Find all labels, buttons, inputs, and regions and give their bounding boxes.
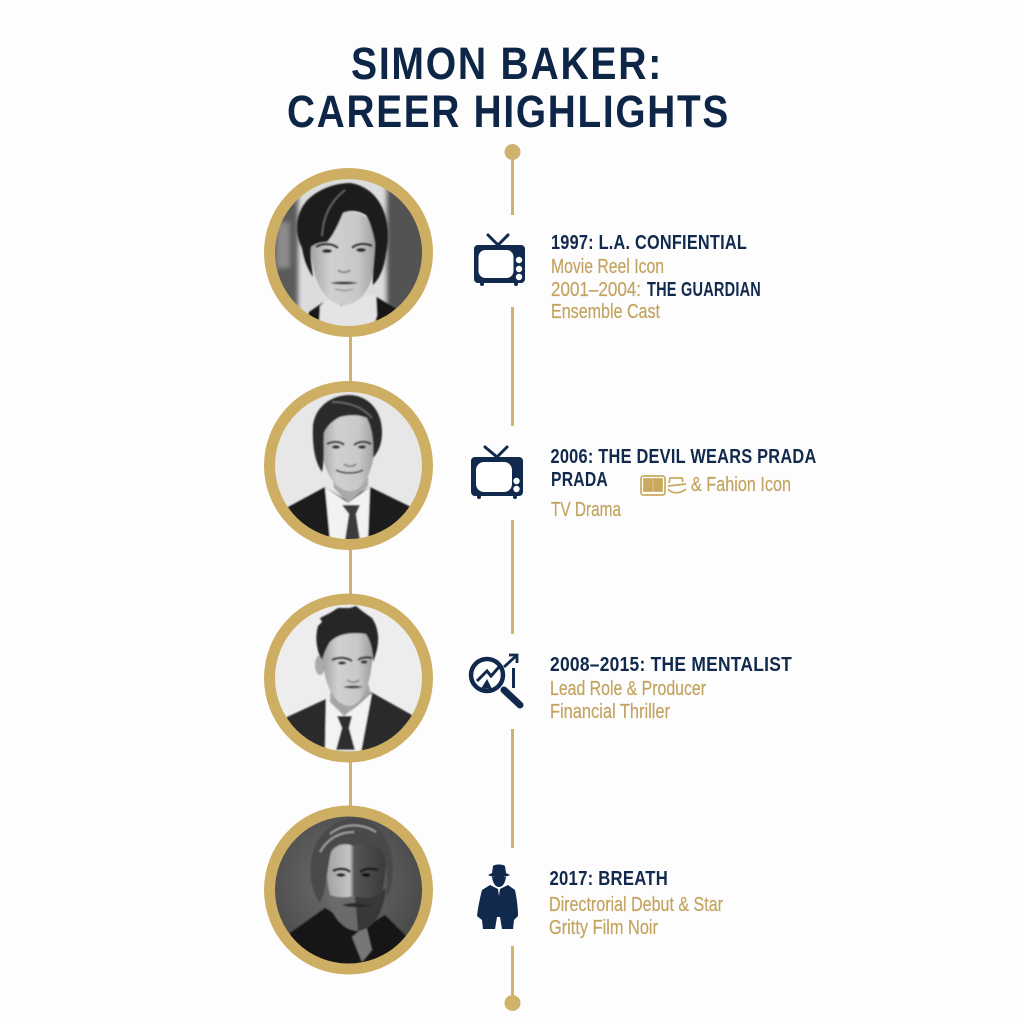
icon: television 1 (474, 235, 525, 286)
text: 1997 and 2001-2004 entries: Movie Reel Icon (551, 256, 664, 278)
text: 1997 and 2001-2004 entries: 1997: L.A. CONFIENTIAL (551, 231, 747, 254)
text: 2006 entry: 2006: THE DEVIL WEARS PRADA (550, 445, 816, 468)
text: 2017 entry: 2017: BREATH (550, 867, 668, 890)
text: 2017 entry: Directrorial Debut & Star (549, 894, 723, 916)
text: 1997 and 2001-2004 entries: THE GUARDIAN (647, 278, 761, 301)
title: SIMON BAKER: (351, 38, 663, 89)
text: 2008-2015 entry (550, 653, 792, 723)
icon: magnifier with chart (471, 655, 520, 705)
text: 2006 entry: TV Drama (551, 499, 622, 521)
title: CAREER HIGHLIGHTS (287, 86, 730, 137)
text: 2008-2015 entry: Financial Thriller (550, 701, 670, 723)
icon: television 2 (471, 447, 523, 499)
text: 2008-2015 entry: Lead Role & Producer (550, 678, 706, 700)
icon: book and shoe (641, 476, 686, 495)
text: 1997 and 2001-2004 entries (551, 231, 761, 323)
text: 2008-2015 entry: 2008–2015: THE MENTALIST (550, 653, 792, 676)
text: 2006 entry: & Fahion Icon (691, 474, 791, 496)
icon: noir detective silhouette (477, 864, 518, 929)
title (287, 38, 730, 137)
text: 2017 entry (549, 867, 723, 939)
portrait 4: bearded actor in shadow (270, 810, 430, 970)
portrait connector lines (349, 336, 352, 807)
text: 2006 entry: PRADA (551, 468, 608, 491)
text: 1997 and 2001-2004 entries: 2001–2004: (551, 279, 641, 301)
portrait 3: suited actor three-quarter (270, 598, 430, 758)
text: 2017 entry: Gritty Film Noir (549, 917, 658, 939)
central timeline (504, 144, 520, 1011)
text: 1997 and 2001-2004 entries: Ensemble Cast (551, 301, 660, 323)
portrait 1: young actor (270, 174, 430, 332)
portrait 2: suited actor smiling (270, 385, 430, 545)
text: 2006 entry (550, 445, 816, 521)
